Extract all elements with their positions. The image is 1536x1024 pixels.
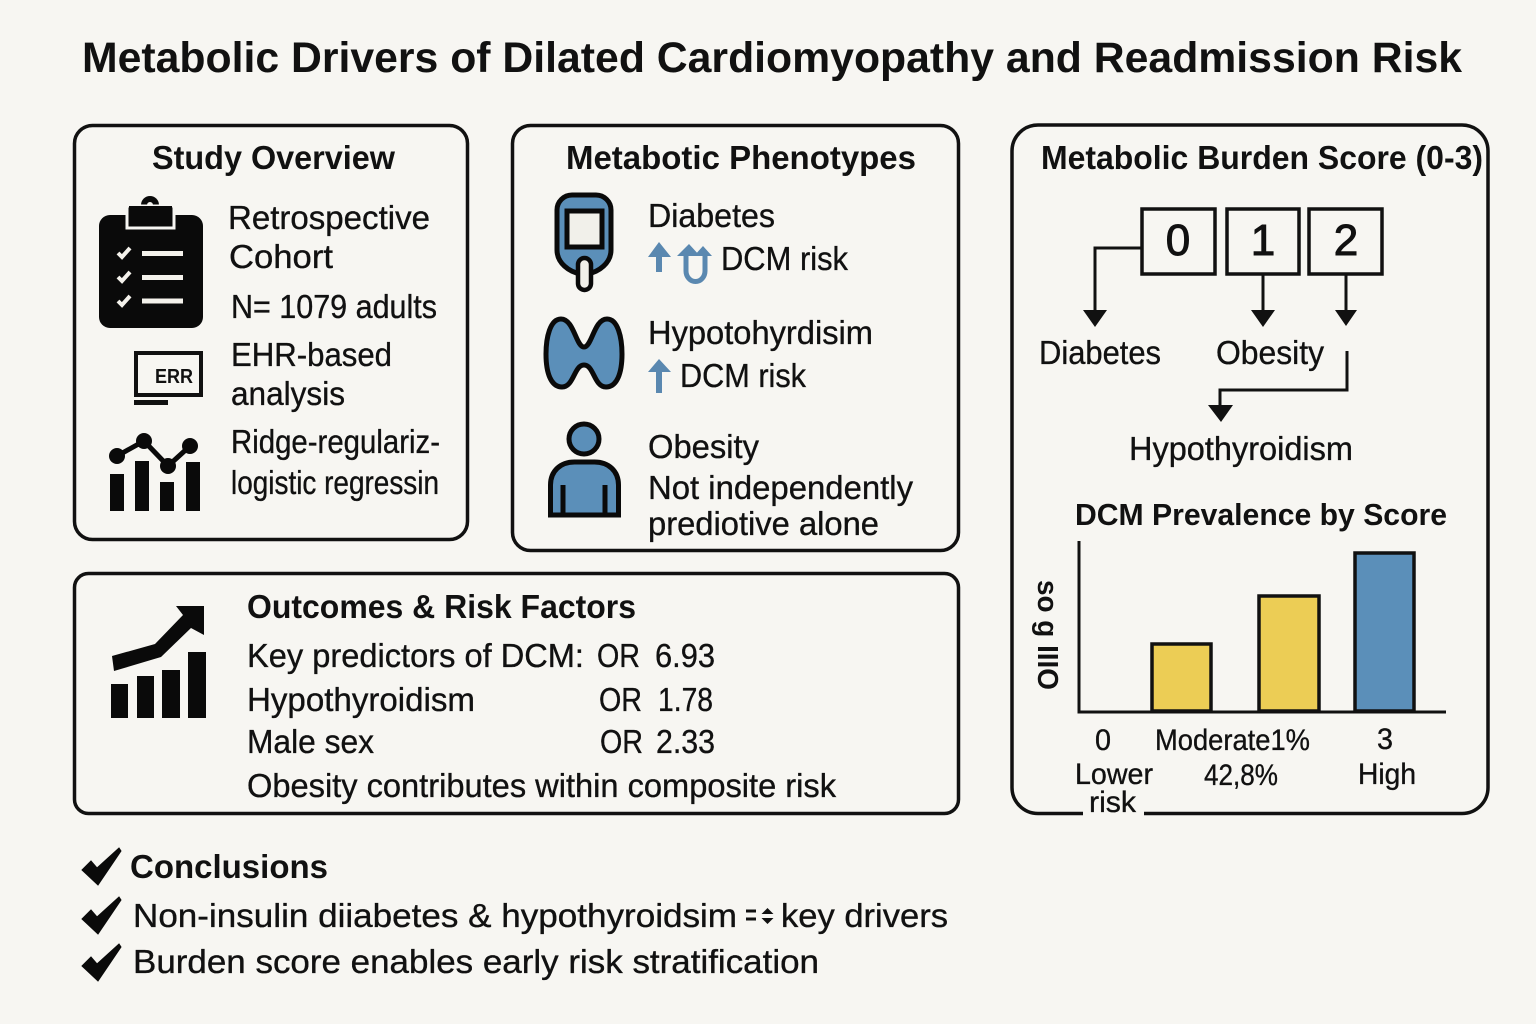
panel: outcomes and risk factors — [74, 574, 958, 814]
panel: metabolic burden score — [1012, 125, 1488, 819]
panel: metabolic phenotypes — [512, 126, 958, 550]
title: Metabolic Drivers of Dilated Cardiomyopathy and Readmission Risk — [82, 34, 1462, 82]
text: retrospective cohort — [228, 199, 430, 275]
text: predictors table: 2.33 — [656, 723, 715, 760]
arrow: to hypothyroidism — [1208, 351, 1347, 422]
axis labels: 0 — [1095, 724, 1111, 757]
icon: glucose meter — [557, 195, 611, 290]
axis labels: 42,8% — [1204, 759, 1278, 792]
text: predictors table: 6.93 — [655, 637, 715, 674]
axis labels: Moderate1% — [1155, 724, 1310, 757]
score boxes: 1 — [1251, 216, 1275, 265]
text: predictors table: OR — [597, 637, 640, 674]
axis labels — [1075, 723, 1416, 819]
text: predictors table: Obesity contributes within composite risk — [247, 767, 836, 804]
heading: study overview: Study Overview — [152, 139, 395, 176]
heading: outcomes: Outcomes & Risk Factors — [247, 588, 636, 625]
text: predictors table: Key predictors of DCM: — [247, 637, 584, 674]
arrow: score 2 — [1335, 274, 1357, 326]
score boxes: 0 — [1166, 216, 1190, 265]
icon: person — [550, 424, 618, 515]
text: predictors table: OR — [599, 681, 642, 718]
arrow: score 1 to obesity — [1251, 274, 1275, 327]
text: hypothyroidism — [648, 314, 873, 394]
text: regression: logistic regressin — [231, 464, 439, 501]
icon: EHR monitor: ERR — [155, 366, 193, 388]
label: hypothyroidism: Hypothyroidism — [1129, 430, 1353, 467]
arrow: score 0 to diabetes — [1083, 248, 1142, 327]
text: EHR analysis — [231, 336, 392, 412]
section: conclusions — [82, 848, 948, 981]
y-axis label: so g IIIO — [1031, 580, 1063, 690]
heading: conclusions: Conclusions — [130, 848, 328, 885]
text: obesity: Not independently — [648, 469, 913, 506]
text: conclusion 1 — [133, 897, 948, 934]
icon: check — [82, 897, 121, 934]
text: EHR analysis: EHR-based — [231, 336, 392, 373]
text: regression — [231, 423, 440, 501]
text: conclusion 1: key drivers — [781, 897, 948, 934]
icon: thyroid — [546, 319, 622, 387]
text: obesity — [648, 428, 913, 542]
text: predictors table: OR — [600, 723, 643, 760]
panel: study overview — [74, 126, 468, 540]
heading: burden score: Metabolic Burden Score (0-3) — [1041, 139, 1483, 176]
axis labels: risk — [1089, 786, 1137, 819]
chart title: DCM Prevalence by Score — [1075, 497, 1447, 532]
text: sample size: N= 1079 adults — [231, 288, 437, 325]
text: predictors table: Hypothyroidism — [247, 681, 475, 718]
icon: chart with trend — [109, 433, 200, 511]
text: obesity: prediotive alone — [648, 505, 879, 542]
text: regression: Ridge-regulariz- — [231, 423, 440, 460]
heading: metabolic phenotypes: Metabotic Phenotypes — [566, 139, 916, 176]
label: diabetes: Diabetes — [1039, 334, 1161, 371]
axis labels: Lower — [1075, 758, 1153, 791]
text: retrospective cohort: Retrospective — [228, 199, 430, 236]
text: diabetes: Diabetes — [648, 197, 775, 234]
text: predictors table — [247, 637, 836, 804]
text: hypothyroidism: Hypotohyrdisim — [648, 314, 873, 351]
bar: moderate — [1259, 596, 1319, 711]
text: predictors table: 1.78 — [658, 681, 713, 718]
bar: moderate low — [1152, 644, 1211, 711]
score boxes: 2 — [1334, 216, 1358, 265]
text: retrospective cohort: Cohort — [229, 238, 333, 275]
score boxes — [1142, 209, 1382, 274]
text: hypothyroidism: DCM risk — [680, 357, 806, 394]
text: conclusion 1: Non-insulin diiabetes & hypothyroidsim — [133, 897, 737, 934]
text: EHR analysis: analysis — [231, 375, 345, 412]
bar chart — [1031, 541, 1446, 712]
label: obesity: Obesity — [1216, 334, 1324, 371]
icon: clipboard — [99, 196, 203, 328]
icon: rising bar chart — [111, 606, 206, 718]
text: diabetes: DCM risk — [721, 240, 848, 277]
bar: high — [1355, 553, 1414, 711]
text: conclusion 2: Burden score enables early risk stratification — [133, 943, 819, 980]
axis labels: High — [1358, 758, 1416, 791]
icon: check — [82, 944, 121, 981]
icon: EHR monitor — [134, 353, 201, 402]
axis labels: 3 — [1377, 723, 1393, 756]
text: diabetes — [648, 197, 848, 282]
text: predictors table: Male sex — [247, 723, 374, 760]
text: obesity: Obesity — [648, 428, 759, 465]
icon: check — [82, 848, 121, 885]
